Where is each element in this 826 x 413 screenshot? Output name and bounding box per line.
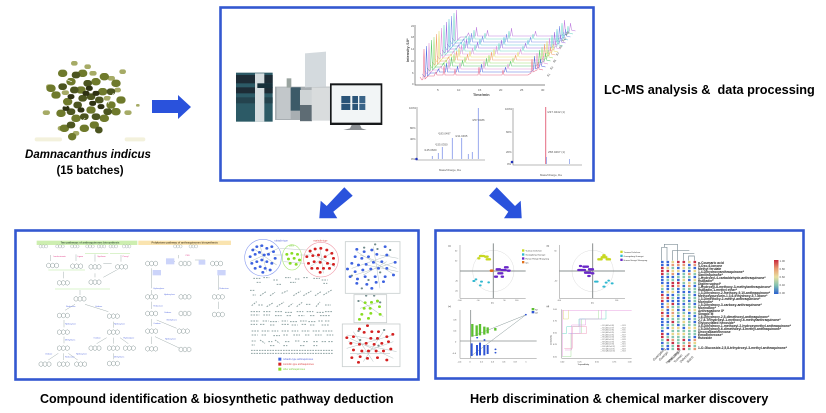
network legend: morindin-type anthraquinones <box>283 363 315 366</box>
dendrogram <box>662 244 694 261</box>
ROC curves d: 0.00 <box>553 356 558 358</box>
pathway connectors <box>48 254 218 360</box>
mass spectrum left: 0% <box>411 157 416 161</box>
panel: compound identification <box>16 230 418 380</box>
ROC curves d: — M9 (AUC=0.93) <box>600 343 614 346</box>
cluster titles <box>274 240 328 247</box>
permutation plot c: -0.4 <box>458 362 462 364</box>
chromatogram overlay chart: S15 <box>564 30 571 37</box>
permutation plot c <box>448 306 539 364</box>
PCA legend b: Guangdong Guangzi <box>624 256 644 258</box>
permutation plot c: 0.4 <box>491 362 495 364</box>
arrow: LC-MS to herb discrimination <box>489 187 522 218</box>
arrow: LC-MS to compound identification <box>319 187 353 218</box>
PCA legend a: Hunan Hengri Shaoyang <box>525 258 550 261</box>
ROC curves d: 0.50 <box>553 332 558 334</box>
pathway header orange <box>138 241 231 245</box>
ROC curves d: — M15 <box>620 330 626 332</box>
pathway enzyme labels: Hydroxylase <box>76 353 88 356</box>
PCA legend a: Guangdong Guangzi <box>525 255 546 257</box>
heatmap compound labels: Rutoside <box>698 336 712 340</box>
ROC curves d: — M2 (AUC=0.97) <box>600 326 614 329</box>
mass spectrum left: 100% <box>409 106 417 110</box>
pathway enzyme labels: Methyltrans <box>65 339 75 342</box>
pathway enzyme labels: Reductase <box>153 304 164 307</box>
heatmap sample labels: Batch <box>686 355 695 364</box>
PCA score plot b: (b) <box>547 246 550 248</box>
pathway green bars <box>48 253 130 289</box>
pathway enzyme labels: Oxidase <box>93 337 102 339</box>
chromatogram overlay chart: S1 <box>546 72 551 78</box>
arrow: herb to LC-MS <box>152 95 191 119</box>
mass spectrum right: 100% <box>505 107 513 111</box>
ROC curves d: — M23 <box>620 348 626 350</box>
mass spectrum right: Mass/Charge, Da <box>540 173 562 177</box>
PCA score plot a: (a) <box>448 246 451 248</box>
cluster titles: rubiadin-type <box>274 240 288 243</box>
permutation plot c: 0.6 <box>502 362 506 364</box>
PCA legend a <box>522 249 550 264</box>
heatmap compound labels: 2,7,8-Trihydroxyl-1-methoxy-6-methylanthraquinone* <box>698 318 781 322</box>
mass spectrum left: Mass/Charge, Da <box>439 168 461 172</box>
panel: LC-MS analysis <box>220 8 594 180</box>
pathway enzyme labels: Hydroxylase <box>153 287 165 290</box>
ROC curves d: sensitivity <box>550 334 553 345</box>
heatmap compound labels: 1-O-Glucoside-2,5,8-trihydroxyl-3-methyl-anthraquinone* <box>698 346 788 350</box>
herb photo: Damnacanthus indicus <box>37 63 143 139</box>
heatmap compound labels: 1,3-Dihydroxy-2-methoxy-9,10-anthraquinone* <box>698 291 771 295</box>
pathway header orange: Polyketone pathway of anthraquinones biosynthesis <box>151 241 218 245</box>
heatmap colour scale: 0.00 <box>780 291 785 295</box>
PCA score plot a: 60 <box>455 251 458 253</box>
pathway enzyme labels: Reductase <box>66 305 76 308</box>
ROC curves d: — M7 (AUC=0.94) <box>600 338 614 341</box>
LC-MS instrument and monitor <box>236 52 382 130</box>
pathway pink labels: Prenyl <box>123 255 129 258</box>
PCA legend a: Yunnan Dehchen <box>525 251 543 253</box>
ROC curves d: 1.00 <box>553 309 558 311</box>
chromatogram overlay chart: 14 <box>411 47 415 51</box>
heatmap compound labels: Rubiadin* <box>698 279 714 283</box>
chromatogram overlay chart: S5 <box>552 58 557 64</box>
pathway enzyme labels: Hydroxylase <box>114 323 126 326</box>
ROC curves d: — M17 <box>620 334 626 336</box>
PCA score plot b: -100 <box>557 300 562 302</box>
pathway highlight boxes <box>153 258 226 275</box>
network legend <box>278 358 315 371</box>
PCA score plot a: -50 <box>477 300 480 302</box>
caption: herb discrimination: Herb discrimination & chemical marker discovery <box>470 392 768 406</box>
permutation plot c: 1 <box>525 362 527 364</box>
network edges <box>250 245 398 362</box>
pathway pink labels: Synthase <box>97 255 106 258</box>
heatmap compound labels: Deoxyalizarinhexose <box>698 330 731 334</box>
ROC curves d: — M20 <box>620 341 626 343</box>
PCA legend b: Yunnan Dehchen <box>624 252 641 254</box>
mass spectrum right: 0% <box>507 162 512 166</box>
heading: LC-MS analysis and data processing: LC-MS analysis & data processing <box>604 83 815 97</box>
heatmap compound labels <box>698 261 792 350</box>
ROC curves d <box>547 306 632 366</box>
mass spectrum right: 60% <box>506 130 512 134</box>
ROC curves d: — M10 (AUC=0.92) <box>600 345 615 348</box>
pathway structures <box>39 245 224 367</box>
cluster titles: other <box>289 244 295 247</box>
pathway enzyme labels: Hydroxylase <box>164 293 176 296</box>
heatmap colour scale <box>774 259 785 295</box>
chromatogram overlay chart: Time/min <box>473 93 490 97</box>
heatmap colour scale: 0.60 <box>780 275 785 279</box>
chromatogram overlay chart: 5 <box>437 88 439 92</box>
heatmap compound labels: p-Coumaric acid <box>698 261 724 265</box>
permutation plot c: 0.8 <box>453 320 457 322</box>
ROC curves d: 0.50 <box>595 362 600 364</box>
PCA score plot b: t[1] <box>591 302 594 305</box>
pathway enzyme labels: Methyltrans <box>114 355 124 358</box>
heatmap compound labels: Sinapic M <box>698 312 714 316</box>
ROC curves d: — M6 (AUC=0.94) <box>600 336 614 339</box>
PCA score plot b <box>547 243 648 305</box>
PCA score plot b: 100 <box>615 300 619 302</box>
green nodes <box>287 253 380 319</box>
pathway pink labels: Isochorismate <box>53 255 67 258</box>
heatmap compound labels: 1,3-Dimethoxy-2-methyl-anthraquinone* <box>698 297 761 301</box>
ROC curves d: 0.75 <box>553 321 558 323</box>
chromatogram overlay chart: 25 <box>520 88 524 92</box>
heatmap compound labels: Glycosylated hexoside* <box>698 321 736 325</box>
herb name label: Damnacanthus indicus <box>25 149 151 161</box>
cluster circles <box>245 239 338 277</box>
mass spectrum left: 40% <box>410 137 416 141</box>
chromatogram overlay chart: 10 <box>457 88 461 92</box>
heatmap sample labels: Yunnan <box>673 353 684 364</box>
heatmap compound labels: 1,6-Dihydroxy-2,5-dimethoxyl-anthraquinone* <box>698 315 770 319</box>
pathway enzyme labels: Hydroxylase <box>123 336 135 339</box>
ROC curves d: 0.75 <box>612 362 617 364</box>
pathway enzyme labels: Oxidase <box>45 354 53 356</box>
mass spectrum left <box>409 106 485 172</box>
chromatogram overlay chart <box>406 10 576 97</box>
blue nodes <box>250 246 395 288</box>
ROC curves d: — M3 (AUC=0.96) <box>600 329 614 332</box>
heatmap compound labels: Morindone* <box>698 306 717 310</box>
chromatogram overlay chart: S9 <box>558 44 563 50</box>
heatmap compound labels: 1,5-Dihydroxy-3-carboxy-anthraquinone* <box>698 303 762 307</box>
permutation plot c: 0.4 <box>453 331 457 333</box>
heatmap colour scale: 1.00 <box>780 259 785 263</box>
ROC curves d: (d) <box>547 306 550 308</box>
ROC curves d: — M24 <box>620 351 626 353</box>
heatmap colour scale: 0.40 <box>780 283 785 287</box>
heatmap compound labels: Emodinhexose* <box>698 333 723 337</box>
ROC curves d: — M18 <box>620 337 626 339</box>
chromatogram overlay chart: Intensity /10⁶ <box>406 38 410 62</box>
pathway pink labels: PKS <box>186 255 190 257</box>
permutation plot c: -0.4 <box>452 353 457 355</box>
heatmap compound labels: Morindin* <box>698 300 714 304</box>
mass spectrum right: 258.0497 (1) <box>548 150 565 154</box>
pathway enzyme labels: Hydroxylase <box>165 338 177 341</box>
heatmap colour scale: 0.80 <box>780 267 785 271</box>
heatmap sample labels: Dehchen <box>679 352 691 364</box>
mass spectrum left: ¹211.0495 <box>455 134 468 138</box>
gray nodes <box>352 244 390 346</box>
PCA score plot a: 50 <box>503 300 506 302</box>
panel: herb discrimination <box>436 230 804 378</box>
chromatogram overlay chart: S3 <box>549 65 554 71</box>
pathway enzyme labels: Oxidase <box>164 312 172 314</box>
chromatogram overlay chart: 0 <box>412 82 414 86</box>
heatmap compound labels: Methyl ferulate <box>698 267 721 271</box>
heatmap compound labels: 1,4-Dihydroxyanthraquinone* <box>698 270 745 274</box>
ROC curves d: — M14 <box>620 327 626 329</box>
pathway enzyme labels: Reductase <box>65 355 75 358</box>
pathway header green <box>37 241 137 245</box>
chromatogram overlay chart: 20 <box>499 88 503 92</box>
mass spectrum left: ¹183.0497 <box>438 132 451 136</box>
ROC curves d: — M19 <box>620 339 626 341</box>
PCA score plot a: -100 <box>458 300 463 302</box>
network legend: rubiadin-type anthraquinones <box>283 358 314 361</box>
ROC curves d: 0.00 <box>560 362 565 364</box>
PCA legend b <box>620 251 648 262</box>
mass spectrum left: ¹145.0660 <box>424 148 437 152</box>
pathway enzyme labels: Reductase <box>219 287 230 290</box>
chromatogram overlay chart: 22 <box>411 24 415 28</box>
ROC curves d: — M22 <box>620 346 626 348</box>
ROC curves d: — M1 (AUC=0.98) <box>600 324 614 327</box>
cluster titles: morindin-type <box>313 240 328 243</box>
chromatogram overlay chart: 30 <box>541 88 545 92</box>
biosynthetic pathway diagram <box>37 241 231 367</box>
ROC curves d: — M8 (AUC=0.93) <box>600 340 614 343</box>
mass spectrum left: ¹257.0486 <box>472 118 485 122</box>
heatmap compound labels: 1,5-Dihydroxy-6-dimethoxyl-3-methyl-anthraquinone* <box>698 327 782 331</box>
heatmap compound labels: 4-Oxo-6-ionone <box>698 264 722 268</box>
red nodes <box>307 248 393 362</box>
permutation plot c: 0.8 <box>514 362 517 364</box>
heatmap sample labels: Guangdong <box>652 347 667 362</box>
chromatogram overlay chart: S7 <box>555 51 560 57</box>
pathway enzyme labels: Hydroxylase <box>65 323 77 326</box>
heatmap compound labels: 1-Hydroxyl-4-carbaldehyde-anthraquinone* <box>698 276 766 280</box>
mass spectrum right: 20% <box>506 150 512 154</box>
heatmap <box>661 262 696 349</box>
PCA score plot a: t[1] <box>491 302 494 305</box>
ROC curves d: — M12 (AUC=0.90) <box>600 350 615 353</box>
ROC curves d: 0.25 <box>553 344 558 346</box>
caption: compound identification: Compound identification & biosynthetic pathway deduction <box>40 392 393 406</box>
PCA score plot b: 60 <box>554 251 557 253</box>
heatmap sample labels <box>652 347 695 365</box>
ROC curves d: 1.00 <box>628 362 632 364</box>
ROC curves d: 1-specificity <box>578 363 590 366</box>
mass spectrum right: ¹237.0442 (1) <box>547 110 565 114</box>
ROC curves d: — M11 (AUC=0.91) <box>600 347 615 350</box>
pathway pink labels <box>53 255 190 258</box>
permutation plot c: (c) <box>448 306 451 308</box>
permutation legend <box>532 308 539 314</box>
PCA score plot a <box>448 243 550 305</box>
PCA score plot a: -30 <box>455 281 459 283</box>
heatmap compound labels: Anthragallone 8* <box>698 309 725 313</box>
PCA score plot a: 30 <box>455 261 458 263</box>
ROC curves d: — M13 <box>620 325 626 327</box>
PCA score plot b: -30 <box>554 281 558 283</box>
network legend: other anthraquinones <box>283 368 306 371</box>
heatmap compound labels: 3,5-Dihydroxy-1-methoxyl-2-hydroxymethyl-anthraquinone* <box>698 324 792 328</box>
PCA legend b: Hunan Hengri Shaoyang <box>624 259 648 262</box>
permutation plot c: 0 <box>469 362 471 364</box>
molecular network <box>245 239 400 371</box>
permutation plot c: 0 <box>455 341 457 343</box>
herb name label <box>25 149 151 177</box>
chromatogram overlay chart: 10 <box>411 59 415 63</box>
small molecular chains <box>250 278 333 353</box>
heatmap compound labels: 1-Hydroxyl-8-methoxy-3-methylanthraquinone* <box>698 285 772 289</box>
ROC curves d: — M4 (AUC=0.95) <box>600 331 614 334</box>
herb name label: (15 batches) <box>56 165 124 177</box>
PCA score plot a: 100 <box>515 300 519 302</box>
mass spectrum right <box>505 107 582 177</box>
heatmap sample labels: Shaoyang <box>667 351 680 364</box>
ROC curves d: — M16 <box>620 332 626 334</box>
chromatogram overlay chart: S12 <box>561 36 568 43</box>
subnetwork frames <box>342 242 400 367</box>
heatmap compound labels: Sanilinquinone* <box>698 273 724 277</box>
permutation plot c: 0.2 <box>480 362 484 364</box>
mass spectrum left: ¹155.0350 <box>435 142 448 146</box>
heatmap sample labels: Hunan Hengri <box>665 348 682 365</box>
pathway enzyme labels: Oxidase <box>153 323 161 325</box>
pathway header green: Two pathways of anthraquinones biosynthesis <box>61 241 120 245</box>
mass spectrum left: 80% <box>410 126 416 130</box>
pathway enzyme labels <box>45 287 230 358</box>
heatmap compound labels: Digiferruginol* <box>698 282 722 286</box>
heatmap compound labels: Rubiadin-1-methyl ether* <box>698 288 738 292</box>
PCA legend a: QC <box>525 262 529 264</box>
ROC curves d: — M21 <box>620 344 626 346</box>
pathway pink labels: Ligase <box>77 256 84 258</box>
pathway enzyme labels: Methyltrans <box>167 318 177 321</box>
chromatogram overlay chart: 6 <box>412 71 414 75</box>
pathway enzyme labels: Oxidase <box>95 306 103 308</box>
chromatogram overlay chart: 18 <box>411 35 415 39</box>
ROC curves d: — M5 (AUC=0.95) <box>600 333 614 336</box>
permutation legend: R2 <box>535 309 539 311</box>
chromatogram overlay chart: 15 <box>478 88 482 92</box>
permutation legend: Q2 <box>535 312 539 314</box>
PCA score plot a: -60 <box>455 291 459 293</box>
heatmap compound labels: Methoxypurpurin-1,3,6-trihydroxy-5,7-dione* <box>698 294 768 298</box>
heatmap sample labels: Guangxi <box>658 350 669 362</box>
ROC curves d: 0.25 <box>578 362 582 364</box>
